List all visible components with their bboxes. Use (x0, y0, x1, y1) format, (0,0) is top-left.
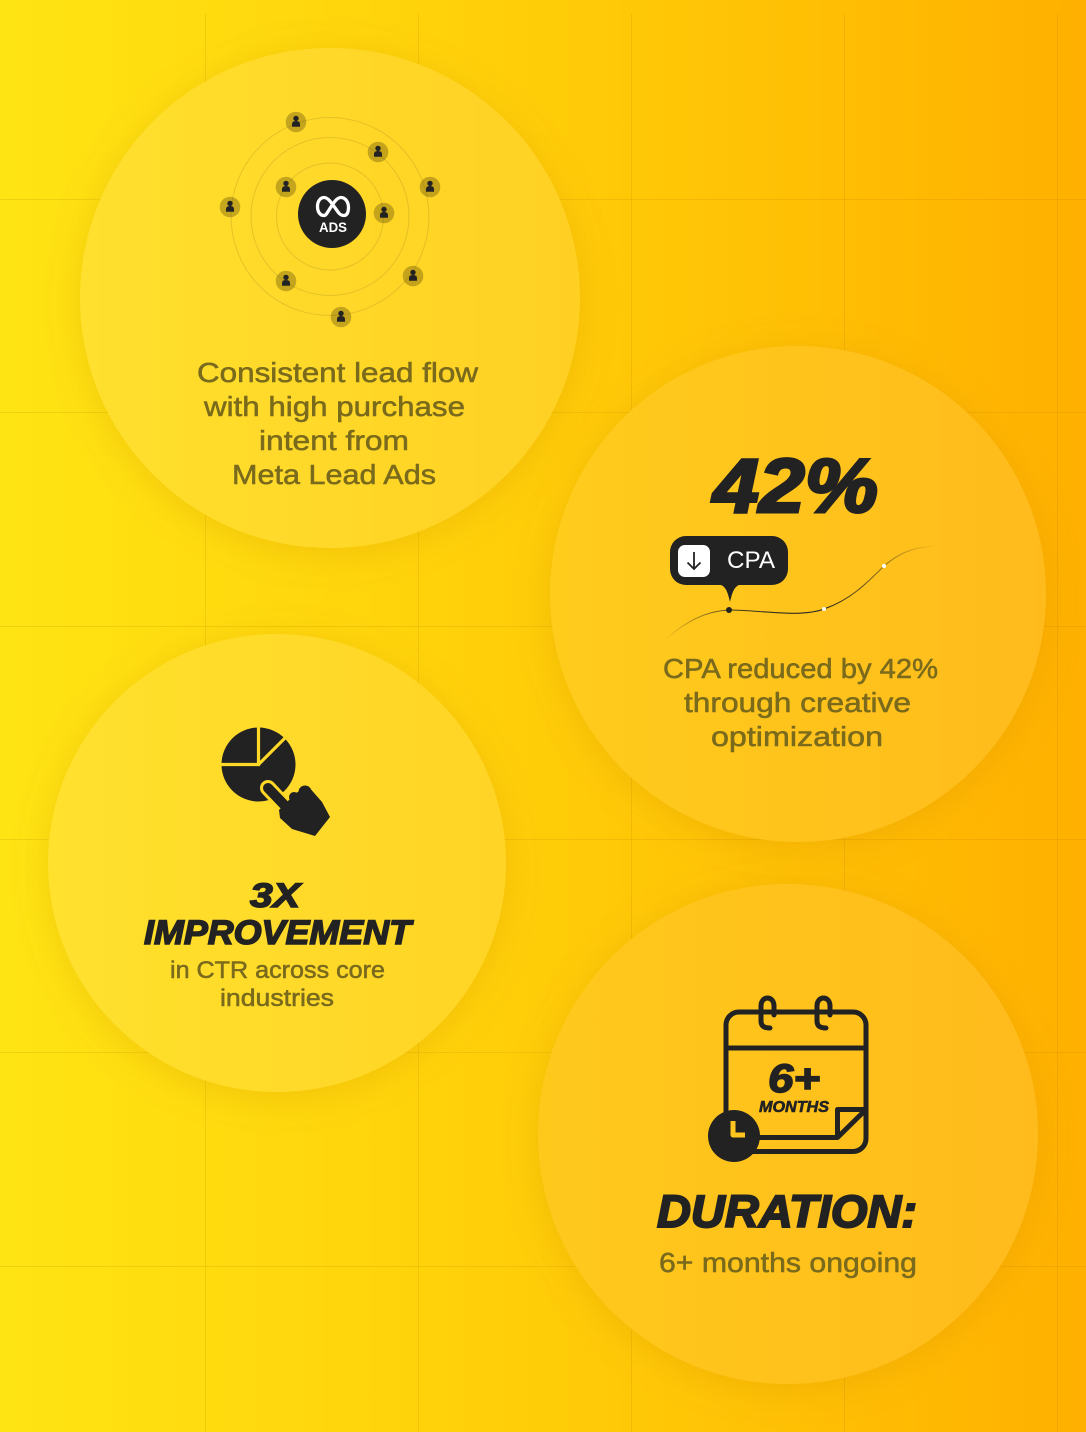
text: lead flow description (197, 357, 479, 490)
text: lead flow description: Consistent lead flow (197, 357, 479, 388)
heading: 42%: 42% (711, 444, 878, 529)
panel: duration (538, 884, 1038, 1384)
icon: pie chart with pointing hand (220, 725, 330, 836)
callout: CPA down badge (670, 536, 788, 602)
text: CTR description (170, 957, 385, 1012)
heading: 3X improvement: 3X (250, 877, 303, 915)
text: lead flow description: with high purchase (203, 391, 465, 422)
heading: 3X improvement: IMPROVEMENT (144, 914, 414, 952)
icon: meta ads orbit (220, 112, 440, 327)
icon: meta ads orbit: ADS (319, 220, 347, 235)
text: duration description: 6+ months ongoing (659, 1247, 917, 1278)
text: lead flow description: intent from (259, 425, 409, 456)
chart: CPA trend curve (665, 546, 935, 640)
text: CPA description: optimization (711, 721, 883, 752)
callout: CPA down badge: CPA (727, 547, 775, 574)
panel: CTR improvement (48, 634, 506, 1092)
heading: duration: DURATION: (657, 1186, 917, 1237)
text: CTR description: in CTR across core (170, 957, 385, 984)
text: CPA description (663, 653, 938, 752)
panel: meta lead ads (80, 48, 580, 548)
text: CPA description: CPA reduced by 42% (663, 653, 938, 684)
icon: calendar with clock (708, 998, 866, 1162)
text: CTR description: industries (220, 985, 334, 1012)
panel: CPA reduction (550, 346, 1046, 842)
heading: 3X improvement (144, 877, 414, 952)
icon: calendar with clock: 6+ (768, 1057, 820, 1101)
icon: calendar with clock: MONTHS (759, 1099, 829, 1116)
text: CPA description: through creative (684, 687, 911, 718)
text: lead flow description: Meta Lead Ads (232, 459, 436, 490)
